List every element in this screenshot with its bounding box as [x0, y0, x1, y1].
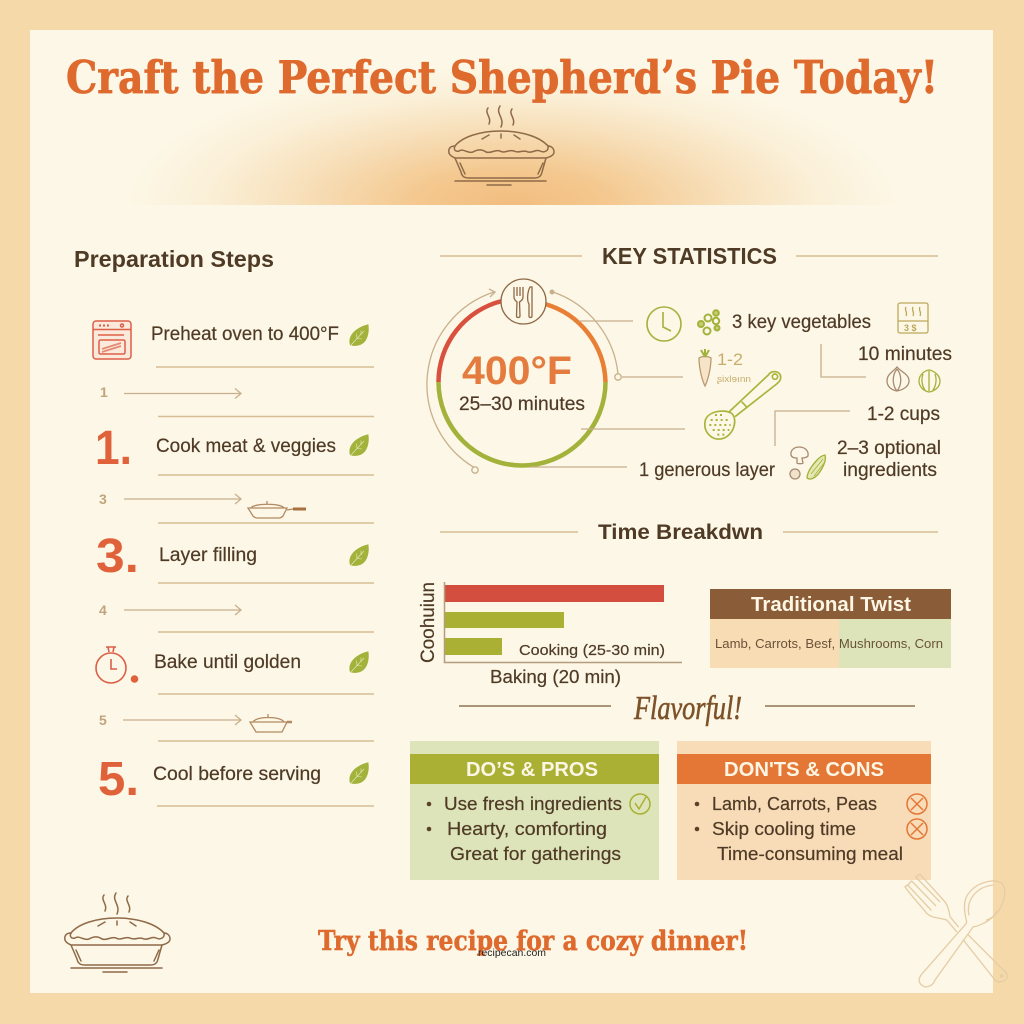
do's bullets: Great for gatherings [450, 843, 621, 864]
icon: mushroom and corn [790, 447, 825, 479]
twist body left [710, 619, 839, 668]
twist body right [839, 619, 951, 668]
icon: leaf 3 [349, 544, 369, 566]
bar chart [418, 582, 682, 687]
panel: do's and pros [410, 741, 659, 880]
panel: don'ts and cons [677, 741, 931, 880]
icon: ladle [705, 372, 781, 439]
step 1 text: Preheat oven to 400°F [151, 324, 339, 345]
outer arrows [427, 289, 621, 473]
do's background [410, 741, 659, 880]
twist header [710, 589, 951, 619]
icon: oven timer [898, 303, 928, 333]
stat: 1-2: 1-2 [717, 350, 743, 369]
icon: leaf 1 [349, 324, 369, 346]
stat: 1 generous layer: 1 generous layer [639, 460, 776, 481]
twist heading: Traditional Twist [751, 594, 911, 616]
stat: small caption: ʂixlɘınn [717, 374, 751, 385]
flavorful text: Flavorful! [633, 690, 742, 727]
do's heading: DO’S & PROS [466, 759, 598, 781]
arrow 5 [123, 715, 241, 725]
do's header [410, 754, 659, 784]
stat: 10 minutes: 10 minutes [858, 344, 952, 365]
icon: pot [250, 714, 292, 732]
heading: preparation steps: Preparation Steps [74, 246, 274, 272]
don'ts bullets [695, 793, 903, 864]
stat: 2-3 optional ingredients: ingredients [843, 460, 937, 481]
icon: footer pie [65, 893, 170, 972]
axis label: Coohuiun [418, 582, 439, 663]
don'ts heading: DON'TS & CONS [724, 759, 884, 781]
icon: header pie [449, 106, 554, 185]
icon: fork and knife badge [501, 279, 546, 324]
icon: leaf 5 [349, 762, 369, 784]
stat: 3 key vegetables: 3 key vegetables [732, 312, 871, 333]
small step number 3: 3 [99, 491, 107, 507]
panel: time breakdown [418, 520, 938, 687]
bar label: baking: Baking (20 min) [490, 667, 621, 687]
bar: red [445, 585, 664, 602]
stat: 1-2 cups: 1-2 cups [867, 404, 940, 425]
icon: frying pan [248, 501, 306, 518]
icon: vegetables [698, 310, 720, 334]
heading: time breakdown: Time Breakdwn [598, 520, 763, 544]
arrow 1 [124, 388, 241, 398]
step 3 text: Layer filling [159, 545, 257, 566]
step 2 text: Cook meat & veggies [156, 436, 336, 457]
don'ts bullets: Lamb, Carrots, Peas [712, 793, 877, 814]
bar: green short [445, 638, 502, 655]
small step number 4: 4 [99, 602, 107, 618]
icon: cross 2 [907, 819, 927, 839]
gauge ring [438, 301, 606, 466]
icon: timer [96, 647, 138, 683]
gauge value: 400°F [462, 349, 572, 393]
icon: onions [887, 367, 940, 392]
arrow 3 [124, 494, 241, 504]
panel: traditional twist [710, 589, 951, 668]
call to action: Try this recipe for a cozy dinner! [318, 926, 748, 957]
small step number 1: 1 [100, 384, 108, 400]
icon: cross 1 [907, 794, 927, 814]
bar: green middle [445, 612, 564, 628]
icon: leaf 2 [349, 434, 369, 456]
icon: carrot [699, 349, 711, 386]
icon: oven [93, 321, 131, 359]
icon: check [630, 794, 650, 814]
don'ts background [677, 741, 931, 880]
stat: 2-3 optional ingredients [837, 438, 941, 481]
icon: crossed fork and spoon [905, 874, 1007, 987]
icon: clock [647, 307, 681, 341]
bar label: cooking: Cooking (25-30 min) [519, 642, 665, 659]
small step number 5: 5 [99, 712, 107, 728]
step 5 text: Cool before serving [153, 764, 321, 785]
watermark: recipecan.com [478, 948, 546, 959]
arrow 4 [124, 605, 241, 615]
large number 5: 5. [98, 753, 139, 806]
stat: 2-3 optional ingredients: 2–3 optional [837, 438, 941, 459]
gauge caption: 25–30 minutes [459, 394, 585, 415]
large number 1: 1. [95, 422, 132, 475]
don'ts header [677, 754, 931, 784]
step 4 text: Bake until golden [154, 652, 301, 673]
large number 3: 3. [96, 530, 139, 583]
panel: preparation steps [74, 246, 374, 806]
twist contents: Lamb, Carrots, Besf, Mushrooms, Corn [715, 636, 943, 651]
do's bullets: Use fresh ingredients [444, 793, 622, 814]
panel: key statistics [427, 243, 952, 481]
do's bullets: Hearty, comforting [447, 818, 607, 839]
don'ts bullets: Time-consuming meal [717, 843, 903, 864]
icon: oven timer: 3 $ [904, 323, 917, 333]
heading: key statistics: KEY STATISTICS [602, 243, 777, 269]
don'ts bullets: Skip cooling time [712, 818, 856, 839]
icon: leaf 4 [349, 651, 369, 673]
header glow [30, 30, 993, 205]
do's bullets [427, 793, 622, 864]
